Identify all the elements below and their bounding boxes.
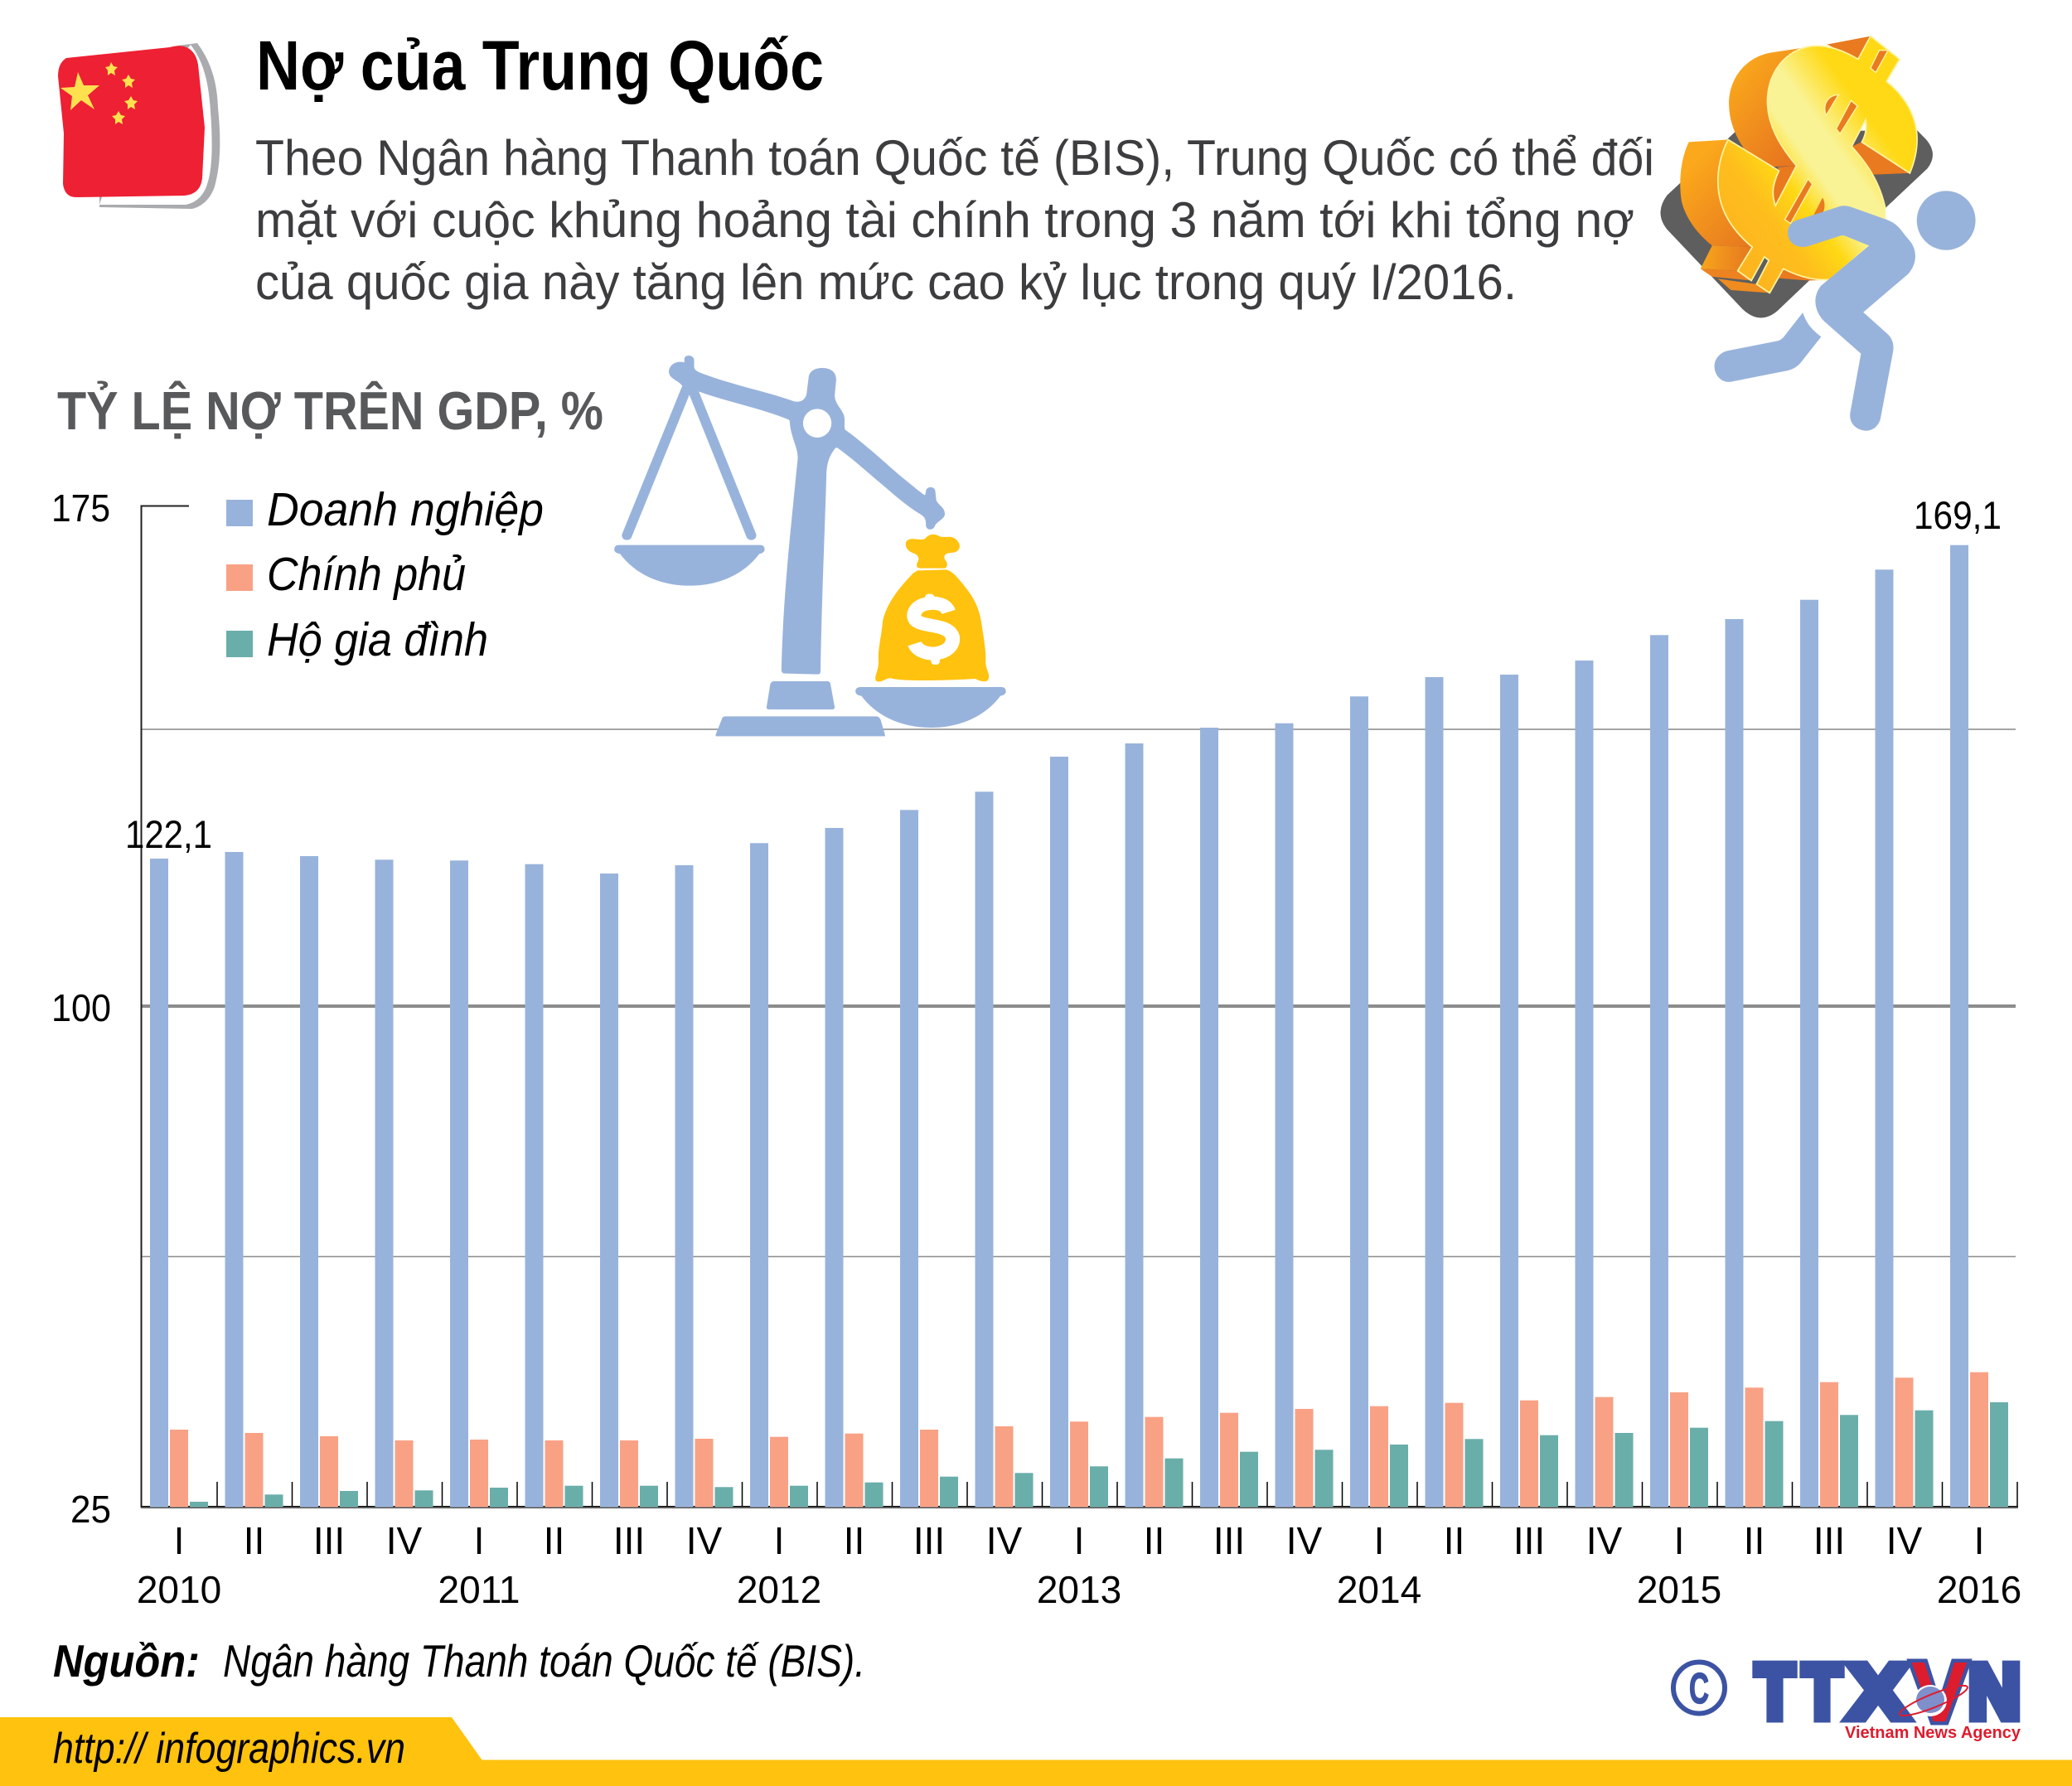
legend: Hộ gia đình (267, 613, 488, 666)
year labels: 2015 (1637, 1568, 1721, 1611)
logo: TTXVN Vietnam News Agency (1755, 1644, 2021, 1742)
logo: TTXVN Vietnam News Agency: N (1968, 1648, 2021, 1735)
quarter labels: I (1374, 1519, 1384, 1562)
year labels: 2013 (1037, 1568, 1121, 1611)
quarter labels: I (174, 1519, 184, 1562)
quarter labels: III (1513, 1519, 1545, 1562)
source note (53, 1635, 865, 1687)
year labels: 2014 (1337, 1568, 1421, 1611)
value labels: 169,1 (1914, 493, 2002, 537)
legend: Chính phủ (267, 548, 466, 601)
quarter labels: III (613, 1519, 645, 1562)
heading: debt to GDP: TỶ LỆ NỢ TRÊN GDP, % (57, 380, 603, 441)
quarter labels: I (474, 1519, 484, 1562)
quarter labels: II (544, 1519, 564, 1562)
quarter labels: II (1744, 1519, 1765, 1562)
quarter labels: I (1974, 1519, 1984, 1562)
footer band (0, 1717, 2072, 1786)
copyright symbol (1673, 1663, 1725, 1714)
quarter labels: IV (1586, 1519, 1623, 1562)
logo: TTXVN Vietnam News Agency: Vietnam News Agency (1845, 1724, 2021, 1742)
quarter labels: I (774, 1519, 784, 1562)
quarter labels: IV (986, 1519, 1023, 1562)
quarter labels: III (1213, 1519, 1245, 1562)
icon: runner carrying dollar sign (1660, 36, 1976, 431)
footer url: http:// infographics.vn (53, 1725, 405, 1773)
source note: Nguồn: (53, 1635, 200, 1687)
logo: TTXVN Vietnam News Agency: T (1803, 1648, 1842, 1735)
icon: balance scale with money bag (614, 356, 1006, 736)
year labels: 2016 (1937, 1568, 2021, 1611)
quarter labels: III (1813, 1519, 1845, 1562)
legend: Doanh nghiệp (267, 483, 544, 536)
y axis labels: 175 (51, 486, 110, 530)
year labels: 2011 (438, 1568, 520, 1611)
intro text block: mặt với cuộc khủng hoảng tài chính trong 3 năm tới khi tổng nợ (255, 192, 1634, 248)
quarter labels (174, 1519, 1984, 1562)
y axis labels: 100 (51, 986, 111, 1029)
source note: Ngân hàng Thanh toán Quốc tế (BIS). (223, 1635, 865, 1687)
year labels: 2010 (137, 1568, 221, 1611)
value labels: 122,1 (125, 812, 212, 856)
series: Hộ gia đình (190, 1402, 2008, 1508)
logo: TTXVN Vietnam News Agency: X (1848, 1648, 1908, 1735)
year labels (137, 1568, 2021, 1611)
quarter labels: IV (686, 1519, 723, 1562)
year labels: 2012 (737, 1568, 821, 1611)
intro text block (255, 130, 1654, 310)
y axis labels: 25 (70, 1488, 111, 1531)
grid lines (141, 728, 2016, 1257)
series: Chính phủ (170, 1372, 1988, 1508)
quarter labels: II (1444, 1519, 1464, 1562)
quarter labels: IV (1886, 1519, 1923, 1562)
quarter labels: II (244, 1519, 264, 1562)
baseline overlay (141, 1507, 2018, 1508)
quarter labels: III (313, 1519, 345, 1562)
quarter labels: IV (386, 1519, 423, 1562)
intro text block: của quốc gia này tăng lên mức cao kỷ lục trong quý I/2016. (255, 254, 1517, 310)
quarter labels: IV (1286, 1519, 1323, 1562)
icon: China flag (58, 43, 220, 209)
copyright symbol: C (1689, 1665, 1709, 1713)
quarter labels: I (1074, 1519, 1084, 1562)
intro text block: Theo Ngân hàng Thanh toán Quốc tế (BIS), Trung Quốc có thể đối (255, 130, 1654, 186)
logo: TTXVN Vietnam News Agency: V (1911, 1644, 1968, 1740)
quarter labels: I (1674, 1519, 1684, 1562)
quarter labels: III (913, 1519, 945, 1562)
y axis labels (51, 486, 111, 1531)
title: Nợ của Trung Quốc (256, 27, 824, 104)
logo: TTXVN Vietnam News Agency: T (1755, 1648, 1794, 1735)
quarter labels: II (844, 1519, 864, 1562)
legend (226, 483, 544, 666)
value labels (125, 493, 2002, 856)
axes and ticks (141, 506, 2018, 1508)
series: Doanh nghiệp (150, 545, 1968, 1508)
bar chart: debt to GDP by quarter (51, 486, 2021, 1611)
quarter labels: II (1144, 1519, 1164, 1562)
